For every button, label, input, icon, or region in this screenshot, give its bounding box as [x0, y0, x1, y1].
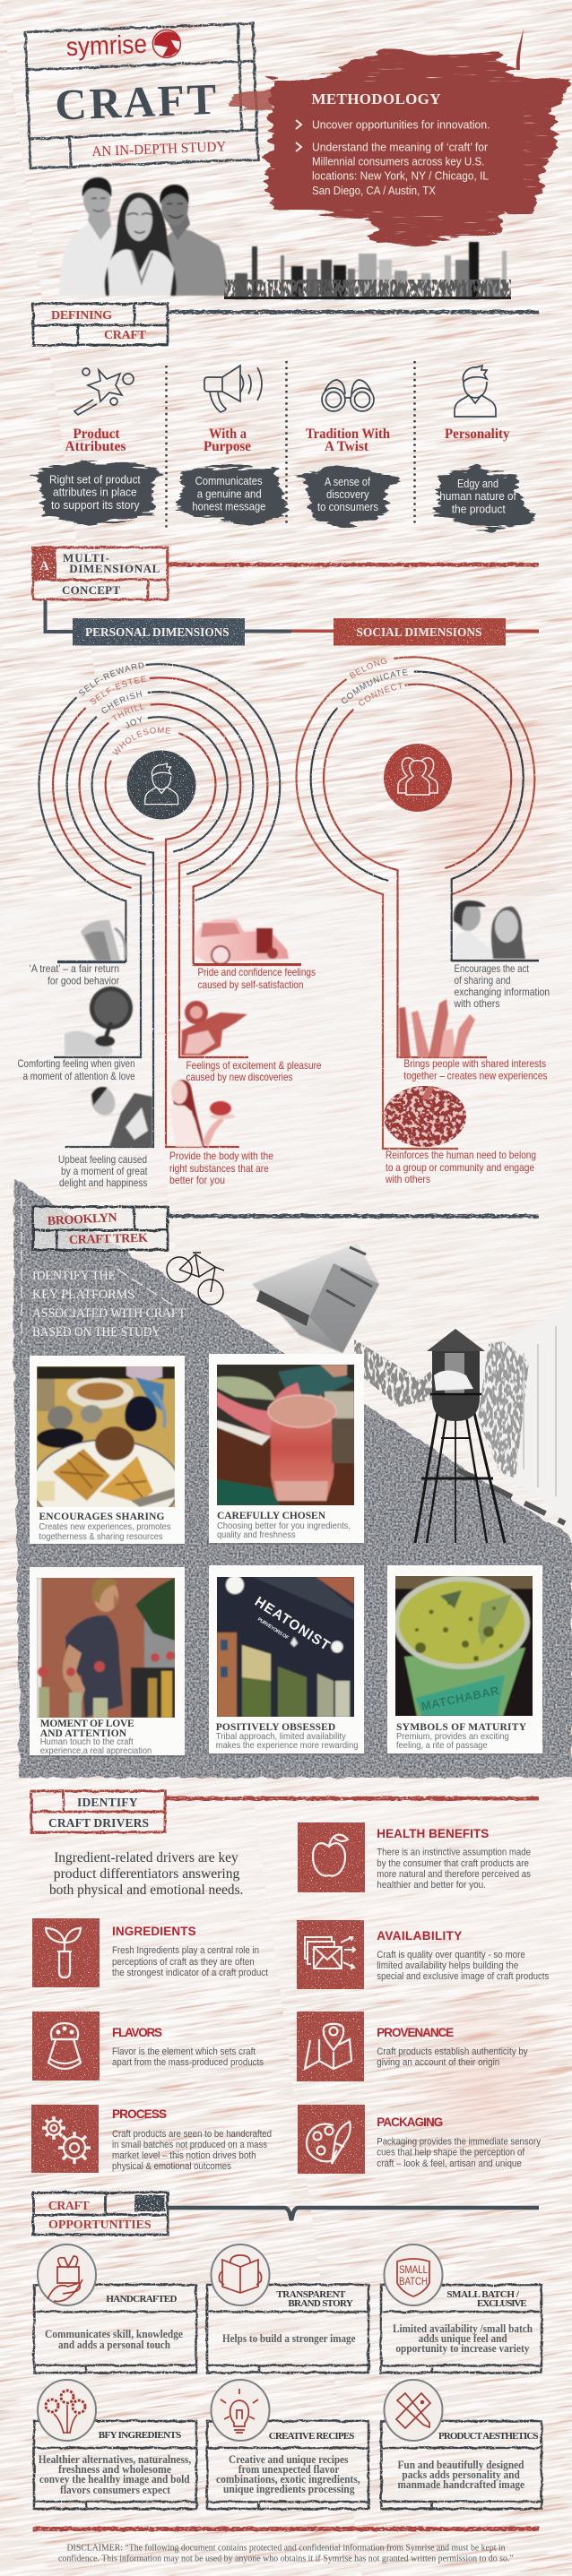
icon: bouquet of flowers: [38, 2380, 96, 2441]
column: tradition with a twist: [296, 380, 399, 529]
photo: waffles and brunch: [37, 1366, 175, 1507]
image: crowd: [384, 1086, 466, 1147]
driver: health benefits: by the consumer that craft products are: [377, 1858, 529, 1869]
card: positively obsessed: Tribal approach, limited availability: [216, 1731, 346, 1742]
illustration: city skyline: [224, 242, 511, 299]
text block: ingredient-related drivers intro: both physical and emotional needs.: [49, 1882, 243, 1898]
title: Purpose: [204, 439, 251, 454]
opportunity card: transparent brand story: BRAND STORY: [288, 2298, 353, 2309]
opportunity card: bfy ingredients: Healthier alternatives, naturalness,: [39, 2453, 191, 2466]
caption: reinforces: with others: [385, 1173, 430, 1185]
ring labels: CHERISH: [101, 691, 142, 713]
opportunity card: bfy ingredients: freshness and wholesome: [58, 2463, 171, 2476]
description blob: the product: [452, 504, 506, 516]
driver: process: Craft products are seen to be handcrafted: [112, 2129, 272, 2140]
column: personality: [430, 366, 536, 530]
caption: encourages: exchanging information: [454, 986, 550, 998]
image: children whispering: [454, 900, 525, 959]
personal dimensions tag: [73, 618, 245, 645]
driver: ingredients: the strongest indicator of a craft product: [112, 1968, 268, 1978]
description blob: human nature of: [439, 490, 516, 503]
intro text: IDENTIFY THE: [32, 1269, 116, 1283]
photo: heatonist storefront: HEATONIST: [252, 1594, 333, 1654]
ring labels: COMMUNICATE: [341, 668, 408, 704]
opportunity card: small batch exclusive: adds unique feel and: [419, 2332, 507, 2345]
ring labels: WHOLESOME: [112, 728, 170, 754]
caption: upbeat: Upbeat feeling caused: [58, 1153, 147, 1166]
card: moment of love and attention: [28, 1567, 185, 1757]
driver: ingredients: perceptions of craft as they are often: [112, 1957, 255, 1968]
icon: small batch shield: BATCH: [399, 2275, 428, 2287]
description blob: [32, 462, 161, 527]
illustration: three young adults: [59, 177, 227, 296]
opportunity card: creative recipes: Creative and unique recipes: [229, 2453, 349, 2466]
heading: a multi-dimensional concept: [33, 547, 539, 599]
brush stroke background: [230, 29, 572, 244]
caption: brings people: Brings people with shared interests: [403, 1057, 546, 1070]
icon: map with pin: [305, 2024, 351, 2069]
icon: envelopes with arrows: [305, 1937, 355, 1969]
heading: brooklyn craft trek: [33, 1207, 539, 1251]
logo emblem: [152, 30, 181, 58]
card: positively obsessed: POSITIVELY OBSESSED: [216, 1722, 335, 1733]
card: symbols of maturity: Premium, provides an exciting: [396, 1731, 509, 1742]
heading: a multi-dimensional concept: A: [39, 559, 49, 573]
driver: packaging: craft – look & feel, artisan and unique: [377, 2158, 522, 2169]
caption: brings people: together – creates new experiences: [403, 1070, 547, 1082]
description blob: attributes in place: [53, 486, 137, 498]
heading: identify craft drivers: CRAFT DRIVERS: [48, 1816, 149, 1830]
image: laughing man: [87, 1084, 152, 1147]
column: with a purpose: [176, 366, 285, 525]
driver: process: [31, 2105, 272, 2173]
ring labels: JOY: [126, 717, 142, 728]
intro text: ASSOCIATED WITH CRAFT: [32, 1306, 186, 1321]
text block: ingredient-related drivers intro: Ingredient-related drivers are key: [54, 1850, 238, 1865]
opportunity card: product aesthetics: [381, 2380, 542, 2509]
caption: a treat: for good behavior: [48, 975, 119, 987]
intro text: KEY PLATFORMS: [32, 1288, 134, 1302]
heading: brooklyn craft trek: CRAFT TREK: [69, 1232, 148, 1247]
caption: a treat: ‘A treat’ – a fair return: [29, 962, 119, 975]
icon: gears: [42, 2116, 91, 2164]
callouts: social dimension descriptions: [384, 900, 550, 1185]
icon: binoculars: [322, 380, 374, 411]
photo: man at hot sauce stand: [37, 1578, 175, 1718]
driver: availability: AVAILABILITY: [377, 1929, 462, 1943]
chart: social dimensions concentric rings: [295, 656, 539, 1150]
description blob: Communicates: [195, 475, 263, 487]
icon: megaphone: [204, 366, 262, 412]
card: carefully chosen: [208, 1354, 364, 1545]
caption: encourages: [454, 962, 550, 1010]
icon: sprout in test tube: [46, 1928, 81, 1977]
driver: flavors: FLAVORS: [112, 2026, 162, 2039]
driver: flavors: [32, 2012, 264, 2081]
icon: small batch shield: [384, 2244, 443, 2305]
rings: [297, 657, 539, 1149]
caption: provide: right substances that are: [169, 1162, 269, 1175]
opportunity card: transparent brand story: [207, 2244, 368, 2373]
photo: matcha drink: MATCHABAR: [420, 1684, 500, 1713]
card: encourages sharing: togetherness & sharing resources: [39, 1531, 163, 1542]
icon: person bust: [455, 366, 496, 417]
opportunity card: bfy ingredients: BFY INGREDIENTS: [99, 2430, 181, 2441]
image: astronaut: [181, 1001, 247, 1055]
opportunity card: small batch exclusive: Limited availability /small batch: [393, 2322, 533, 2335]
title CRAFT: CRAFT: [54, 74, 217, 130]
bullet list: locations: New York, NY / Chicago, IL: [312, 170, 489, 183]
driver: provenance: Craft products establish authenticity by: [377, 2046, 528, 2057]
driver: flavors: Flavor is the element which sets craft: [112, 2046, 256, 2057]
driver: availability: special and exclusive image of craft products: [377, 1971, 550, 1982]
description blob: a genuine and: [197, 487, 262, 500]
opportunity card: product aesthetics: packs adds personality and: [402, 2468, 520, 2481]
caption: pride: [197, 966, 316, 991]
caption: provide: better for you: [169, 1174, 225, 1186]
dotted column dividers: [167, 361, 414, 530]
caption: feelings: Feelings of excitement & pleasure: [186, 1059, 322, 1072]
driver: ingredients: [32, 1918, 268, 1987]
description blob: A sense of: [325, 476, 370, 488]
driver: health benefits: HEALTH BENEFITS: [377, 1827, 489, 1840]
opportunity card: small batch exclusive: [381, 2244, 542, 2373]
disclaimer: [58, 2543, 514, 2564]
photo: pink cocktail: [217, 1365, 354, 1505]
description blob: to consumers: [317, 501, 378, 513]
label frame: [33, 304, 168, 345]
title: Product: [74, 426, 120, 442]
ring labels: SELF-REWARD: [79, 663, 143, 695]
bullet list: Uncover opportunities for innovation.: [312, 118, 490, 131]
title: Attributes: [65, 439, 126, 454]
driver: health benefits: healthier and better for you.: [377, 1880, 486, 1891]
blue rings: [39, 664, 280, 1147]
opportunity card: small batch exclusive: opportunity to increase variety: [395, 2342, 530, 2355]
opportunity card: bfy ingredients: convey the healthy image and bold: [39, 2473, 190, 2486]
driver: process: PROCESS: [112, 2107, 167, 2121]
caption: upbeat: [58, 1153, 148, 1189]
card: encourages sharing: ENCOURAGES SHARING: [39, 1512, 165, 1522]
heading: craft opportunities: [33, 2193, 539, 2235]
social dimensions tag: SOCIAL DIMENSIONS: [357, 625, 482, 639]
opportunity card: handcrafted: HANDCRAFTED: [106, 2294, 177, 2305]
opportunity card: creative recipes: combinations, exotic ingredients,: [216, 2473, 360, 2486]
card: symbols of maturity: [386, 1565, 542, 1755]
card: encourages sharing: [28, 1356, 185, 1546]
icon: gift in hand: [38, 2244, 96, 2305]
card: moment of love and attention: MOMENT OF LOVE: [40, 1719, 134, 1729]
caption: reinforces: [385, 1149, 536, 1185]
driver: availability: limited availability helps building the: [377, 1960, 518, 1971]
intro text: [32, 1269, 186, 1340]
opportunity card: creative recipes: [207, 2380, 368, 2509]
title: [204, 426, 251, 454]
image: vintage car: [195, 919, 289, 964]
driver: flavors: apart from the mass-produced products: [112, 2057, 264, 2068]
driver: process: in small batches not produced on a mass: [112, 2140, 268, 2150]
label frame: [33, 2193, 168, 2235]
logo wordmark: symrise: [65, 30, 147, 62]
title: Personality: [445, 426, 510, 442]
heading: craft opportunities: CRAFT: [48, 2200, 90, 2213]
bullet list: Understand the meaning of ‘craft’ for: [312, 142, 488, 154]
driver: provenance: PROVENANCE: [377, 2026, 454, 2039]
center circle with group icon: [384, 744, 452, 812]
image: seedling tree in hands: [65, 986, 133, 1055]
description blob: [430, 464, 536, 530]
driver: health benefits: There is an instinctive assumption made: [377, 1848, 531, 1858]
disclaimer: confidence. This information may not be used by anyone who obtains it if Symrise has not granted written permission to do so.”: [58, 2554, 514, 2564]
heading: defining craft: [33, 304, 539, 345]
heading: defining craft: DEFINING: [51, 309, 112, 323]
caption: comforting: Comforting feeling when given: [18, 1057, 134, 1070]
column: product attributes: [32, 368, 161, 527]
opportunity card: small batch exclusive: SMALL BATCH /: [446, 2289, 520, 2300]
header stamp: symrise craft title box: [25, 23, 258, 168]
card: positively obsessed: makes the experience more rewarding: [216, 1740, 359, 1751]
opportunity card: bfy ingredients: flavors consumers expect: [60, 2484, 171, 2496]
disclaimer: DISCLAIMER: “The following document contains protected and confidential information from Symrise and must be kept in: [66, 2543, 506, 2554]
illustration: angled brooklyn buildings: [252, 1243, 572, 1538]
bullet list: Millennial consumers across key U.S.: [312, 156, 484, 168]
caption: feelings: caused by new discoveries: [186, 1071, 292, 1083]
intro text: BASED ON THE STUDY: [32, 1325, 160, 1340]
opportunity card: creative recipes: unique ingredients processing: [223, 2483, 355, 2495]
title: Tradition With: [306, 426, 390, 442]
opportunity card: small batch exclusive: EXCLUSIVE: [477, 2298, 527, 2309]
opportunity card: product aesthetics: Fun and beautifully designed: [398, 2459, 524, 2471]
ring labels: BELONG: [350, 658, 387, 679]
description blob: [296, 466, 399, 529]
driver: packaging: Packaging provides the immediate sensory: [377, 2136, 542, 2147]
heading: brooklyn craft trek: BROOKLYN: [47, 1211, 117, 1228]
heading: defining craft: CRAFT: [104, 329, 147, 342]
opportunity card: creative recipes: from unexpected flavor: [238, 2463, 340, 2476]
driver: process: market level – this notion drives both: [112, 2150, 256, 2161]
subtitle: AN IN-DEPTH STUDY: [91, 139, 227, 159]
caption: encourages: of sharing and: [454, 974, 511, 986]
opportunity card: handcrafted: [34, 2244, 196, 2373]
opportunity card: product aesthetics: manmade handcrafted image: [398, 2478, 524, 2491]
dimension headers bar: [45, 600, 539, 645]
grey diagonal street background: [13, 1179, 572, 1778]
caption: upbeat: delight and happiness: [59, 1176, 147, 1189]
card: encourages sharing: Creates new experiences, promotes: [39, 1521, 170, 1532]
text block: ingredient-related drivers intro: product differentiators answering: [54, 1866, 240, 1882]
driver: availability: [297, 1920, 550, 1989]
photo: matcha drink: [395, 1576, 533, 1716]
heading: a multi-dimensional concept: DIMENSIONAL: [69, 562, 160, 575]
driver: health benefits: more natural and therefore perceived as: [377, 1869, 532, 1880]
description blob: [176, 466, 285, 525]
ring labels: CONNECT: [359, 683, 402, 706]
icon: apple: [313, 1835, 348, 1876]
driver: availability: Craft is quality over quantity - so more: [377, 1950, 525, 1960]
card: symbols of maturity: feeling, a rite of passage: [396, 1740, 488, 1751]
ring labels: [79, 663, 170, 754]
heading: craft opportunities: OPPORTUNITIES: [48, 2218, 152, 2232]
caption: reinforces: to a group or community and engage: [386, 1161, 534, 1174]
caption: brings people: [403, 1057, 547, 1082]
personal dimensions tag: PERSONAL DIMENSIONS: [85, 625, 230, 639]
chart: personal dimensions concentric rings: [38, 663, 337, 1149]
text block: ingredient-related drivers intro: [49, 1850, 243, 1898]
opportunity card: transparent brand story: TRANSPARENT: [276, 2289, 346, 2300]
title: With a: [209, 426, 247, 442]
opportunity card: handcrafted: and adds a personal touch: [58, 2339, 170, 2351]
bullet list: [296, 118, 490, 197]
card: carefully chosen: quality and freshness: [217, 1529, 296, 1540]
card: moment of love and attention: experience,a real appreciation: [40, 1745, 152, 1756]
center circle with person: [127, 751, 195, 819]
card: positively obsessed: [208, 1565, 364, 1755]
description blob: to support its story: [51, 499, 140, 512]
driver: ingredients: Fresh Ingredients play a central role in: [112, 1945, 259, 1956]
caption: reinforces: Reinforces the human need to belong: [386, 1149, 536, 1161]
heading: identify craft drivers: IDENTIFY: [77, 1796, 138, 1809]
description blob: discovery: [326, 488, 369, 501]
icon: small batch shield: SMALL: [399, 2263, 428, 2276]
icon: palette and brush: [307, 2122, 351, 2164]
image: raised hands: [399, 999, 475, 1057]
icon: open book: [212, 2244, 269, 2305]
opportunity card: transparent brand story: Helps to build a stronger image: [222, 2332, 356, 2345]
opportunity card: bfy ingredients: [34, 2380, 196, 2509]
street dashes: [22, 1196, 175, 1344]
panel: brooklyn craft trek: [13, 1179, 572, 1778]
label frame: [33, 1207, 168, 1250]
label frame: [31, 1791, 165, 1832]
description blob: honest message: [192, 500, 265, 513]
heading: a multi-dimensional concept: MULTI-: [63, 551, 109, 564]
panel: methodology: [230, 29, 572, 244]
driver: health benefits: [298, 1822, 532, 1892]
driver: provenance: [297, 2012, 528, 2081]
driver: packaging: PACKAGING: [377, 2115, 443, 2129]
illustration: water tower: [415, 1329, 505, 1543]
title: [65, 426, 126, 454]
caption: provide: [169, 1150, 273, 1186]
heading: identify craft drivers: [31, 1791, 539, 1832]
image: beer mug: [81, 920, 126, 961]
opportunity card: handcrafted: Communicates skill, knowledge: [45, 2328, 183, 2340]
stamp frame: [25, 23, 258, 168]
photo: heatonist storefront: PURVEYORS OF: [256, 1617, 290, 1641]
card: carefully chosen: CAREFULLY CHOSEN: [217, 1511, 326, 1521]
red rings: [53, 677, 301, 1147]
driver: provenance: giving an account of their origin: [377, 2057, 499, 2068]
ring labels: THRILL: [111, 703, 145, 720]
heading: METHODOLOGY: [312, 90, 441, 108]
caption: encourages: Encourages the act: [454, 962, 530, 975]
caption: pride: caused by self-satisfaction: [197, 978, 303, 991]
illustration: bicycle: [167, 1253, 224, 1305]
social dimensions tag: [334, 618, 506, 645]
card: moment of love and attention: Human touch to the craft: [40, 1736, 134, 1747]
driver: ingredients: INGREDIENTS: [112, 1925, 196, 1938]
description blob: Right set of product: [49, 473, 141, 486]
caption: encourages: with others: [454, 997, 500, 1010]
icon: light bulb: [212, 2380, 269, 2441]
label frame: [33, 547, 168, 599]
opportunity card: product aesthetics: PRODUCT AESTHETICS: [438, 2431, 538, 2442]
card: symbols of maturity: SYMBOLS OF MATURITY: [396, 1722, 527, 1733]
caption: pride: Pride and confidence feelings: [197, 966, 316, 978]
card: moment of love and attention: AND ATTENTION: [40, 1728, 127, 1739]
callouts: personal dimension descriptions: [18, 919, 322, 1189]
card: carefully chosen: Choosing better for you ingredients,: [217, 1521, 351, 1531]
image: woman with food plate: [170, 1080, 235, 1147]
icon: magic wand: [74, 368, 134, 415]
icon: salt shaker: [48, 2023, 81, 2069]
caption: a treat: [29, 962, 119, 987]
caption: provide: Provide the body with the: [169, 1150, 273, 1162]
photo: heatonist storefront: [217, 1577, 354, 1717]
title: [306, 426, 390, 454]
driver: process: physical & emotional outcomes: [112, 2161, 232, 2172]
caption: comforting: [18, 1057, 135, 1082]
title: A Twist: [325, 439, 369, 454]
bullet list: San Diego, CA / Austin, TX: [312, 185, 437, 197]
caption: upbeat: by a moment of great: [61, 1165, 148, 1177]
heading: a multi-dimensional concept: CONCEPT: [62, 583, 120, 597]
driver: packaging: [298, 2105, 542, 2174]
driver: packaging: cues that help shape the perception of: [377, 2147, 525, 2158]
opportunity card: creative recipes: CREATIVE RECIPES: [269, 2431, 354, 2442]
caption: feelings: [186, 1059, 322, 1083]
description blob: Edgy and: [457, 478, 498, 490]
caption: comforting: a moment of attention & love: [23, 1070, 135, 1082]
icon: pencil and ruler: [384, 2380, 443, 2441]
